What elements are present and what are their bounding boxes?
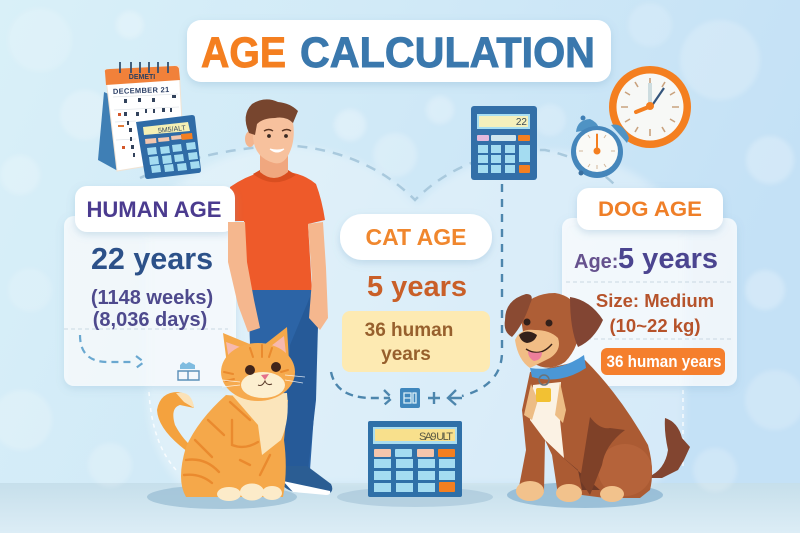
connector: left dashed arrow [331, 372, 392, 405]
icon: bottom calculator [337, 421, 493, 507]
dog tail [648, 418, 690, 478]
title text: AGE [201, 29, 286, 77]
man arms [228, 222, 260, 332]
figure: man [228, 99, 332, 495]
cat tail [157, 392, 194, 452]
icon: alarm clock [571, 116, 629, 178]
icon: small printer [178, 362, 199, 380]
callout: cat human years: 36 human [365, 320, 453, 341]
icon: small list tile [400, 388, 420, 408]
human panel dashed arrow [80, 335, 144, 368]
dog collar and tag [530, 355, 586, 380]
callout: dog human years: 36 human years [606, 353, 722, 371]
figure: dog [505, 293, 690, 508]
panel: human age [64, 216, 236, 386]
icon: plus sign [428, 392, 440, 404]
connector: right arrow head [448, 390, 462, 405]
panel: dog age [562, 188, 737, 386]
dog age value: 5 years [618, 243, 718, 275]
cat paws [217, 487, 241, 501]
callout: dog human years [601, 348, 725, 375]
heading: cat age: CAT AGE [366, 224, 466, 250]
dog size: Size: Medium [596, 290, 714, 311]
icon: top calculator [471, 106, 537, 180]
human years value: 22 years [91, 242, 213, 276]
dog age value: Age: [574, 251, 618, 273]
dog shadow [507, 482, 663, 508]
heading: cat age [340, 214, 492, 260]
icon: desk calendar: DECEMBER 21 [113, 85, 170, 96]
dog face [524, 318, 530, 326]
heading: dog age: DOG AGE [598, 197, 702, 221]
title banner [187, 20, 611, 82]
dog body [518, 360, 652, 498]
cat face [245, 365, 255, 375]
heading: dog age [577, 188, 723, 230]
dog head [520, 293, 580, 368]
cat shadow [147, 485, 297, 509]
title text: CALCULATION [300, 29, 595, 77]
callout: cat human years [342, 311, 490, 372]
icon: desk calendar: 5M5/ALT [158, 125, 187, 135]
figure: cat [147, 327, 305, 509]
cat ears [223, 333, 252, 365]
heading: human age [75, 186, 235, 232]
man hair [246, 99, 298, 135]
icon: desk calendar: DEMETI [129, 74, 155, 81]
icon: bottom calculator: SA9 ULT [419, 431, 453, 443]
icon: top calculator: 22 [516, 117, 527, 128]
human weeks and days: (8,036 days) [93, 309, 207, 331]
human weeks and days: (1148 weeks) [91, 287, 213, 309]
man shoe [282, 466, 332, 493]
man face [267, 134, 271, 138]
icon: desk calendar [98, 62, 201, 179]
man neck and head [260, 154, 288, 178]
connector: vertical dashed line [462, 184, 502, 396]
man shirt [230, 172, 325, 291]
dog chest [530, 382, 564, 458]
cat head [221, 343, 295, 401]
cat years value: 5 years [367, 271, 467, 303]
cat body [181, 395, 288, 497]
icon: wall clock [609, 66, 691, 148]
figure: man body behind the heading [230, 170, 325, 291]
dog size: (10~22 kg) [609, 315, 701, 336]
heading: human age: HUMAN AGE [86, 197, 222, 222]
callout: cat human years: years [381, 344, 431, 365]
man legs and jeans [248, 290, 318, 470]
dog paws [516, 481, 544, 501]
panel: cat age [340, 214, 492, 372]
